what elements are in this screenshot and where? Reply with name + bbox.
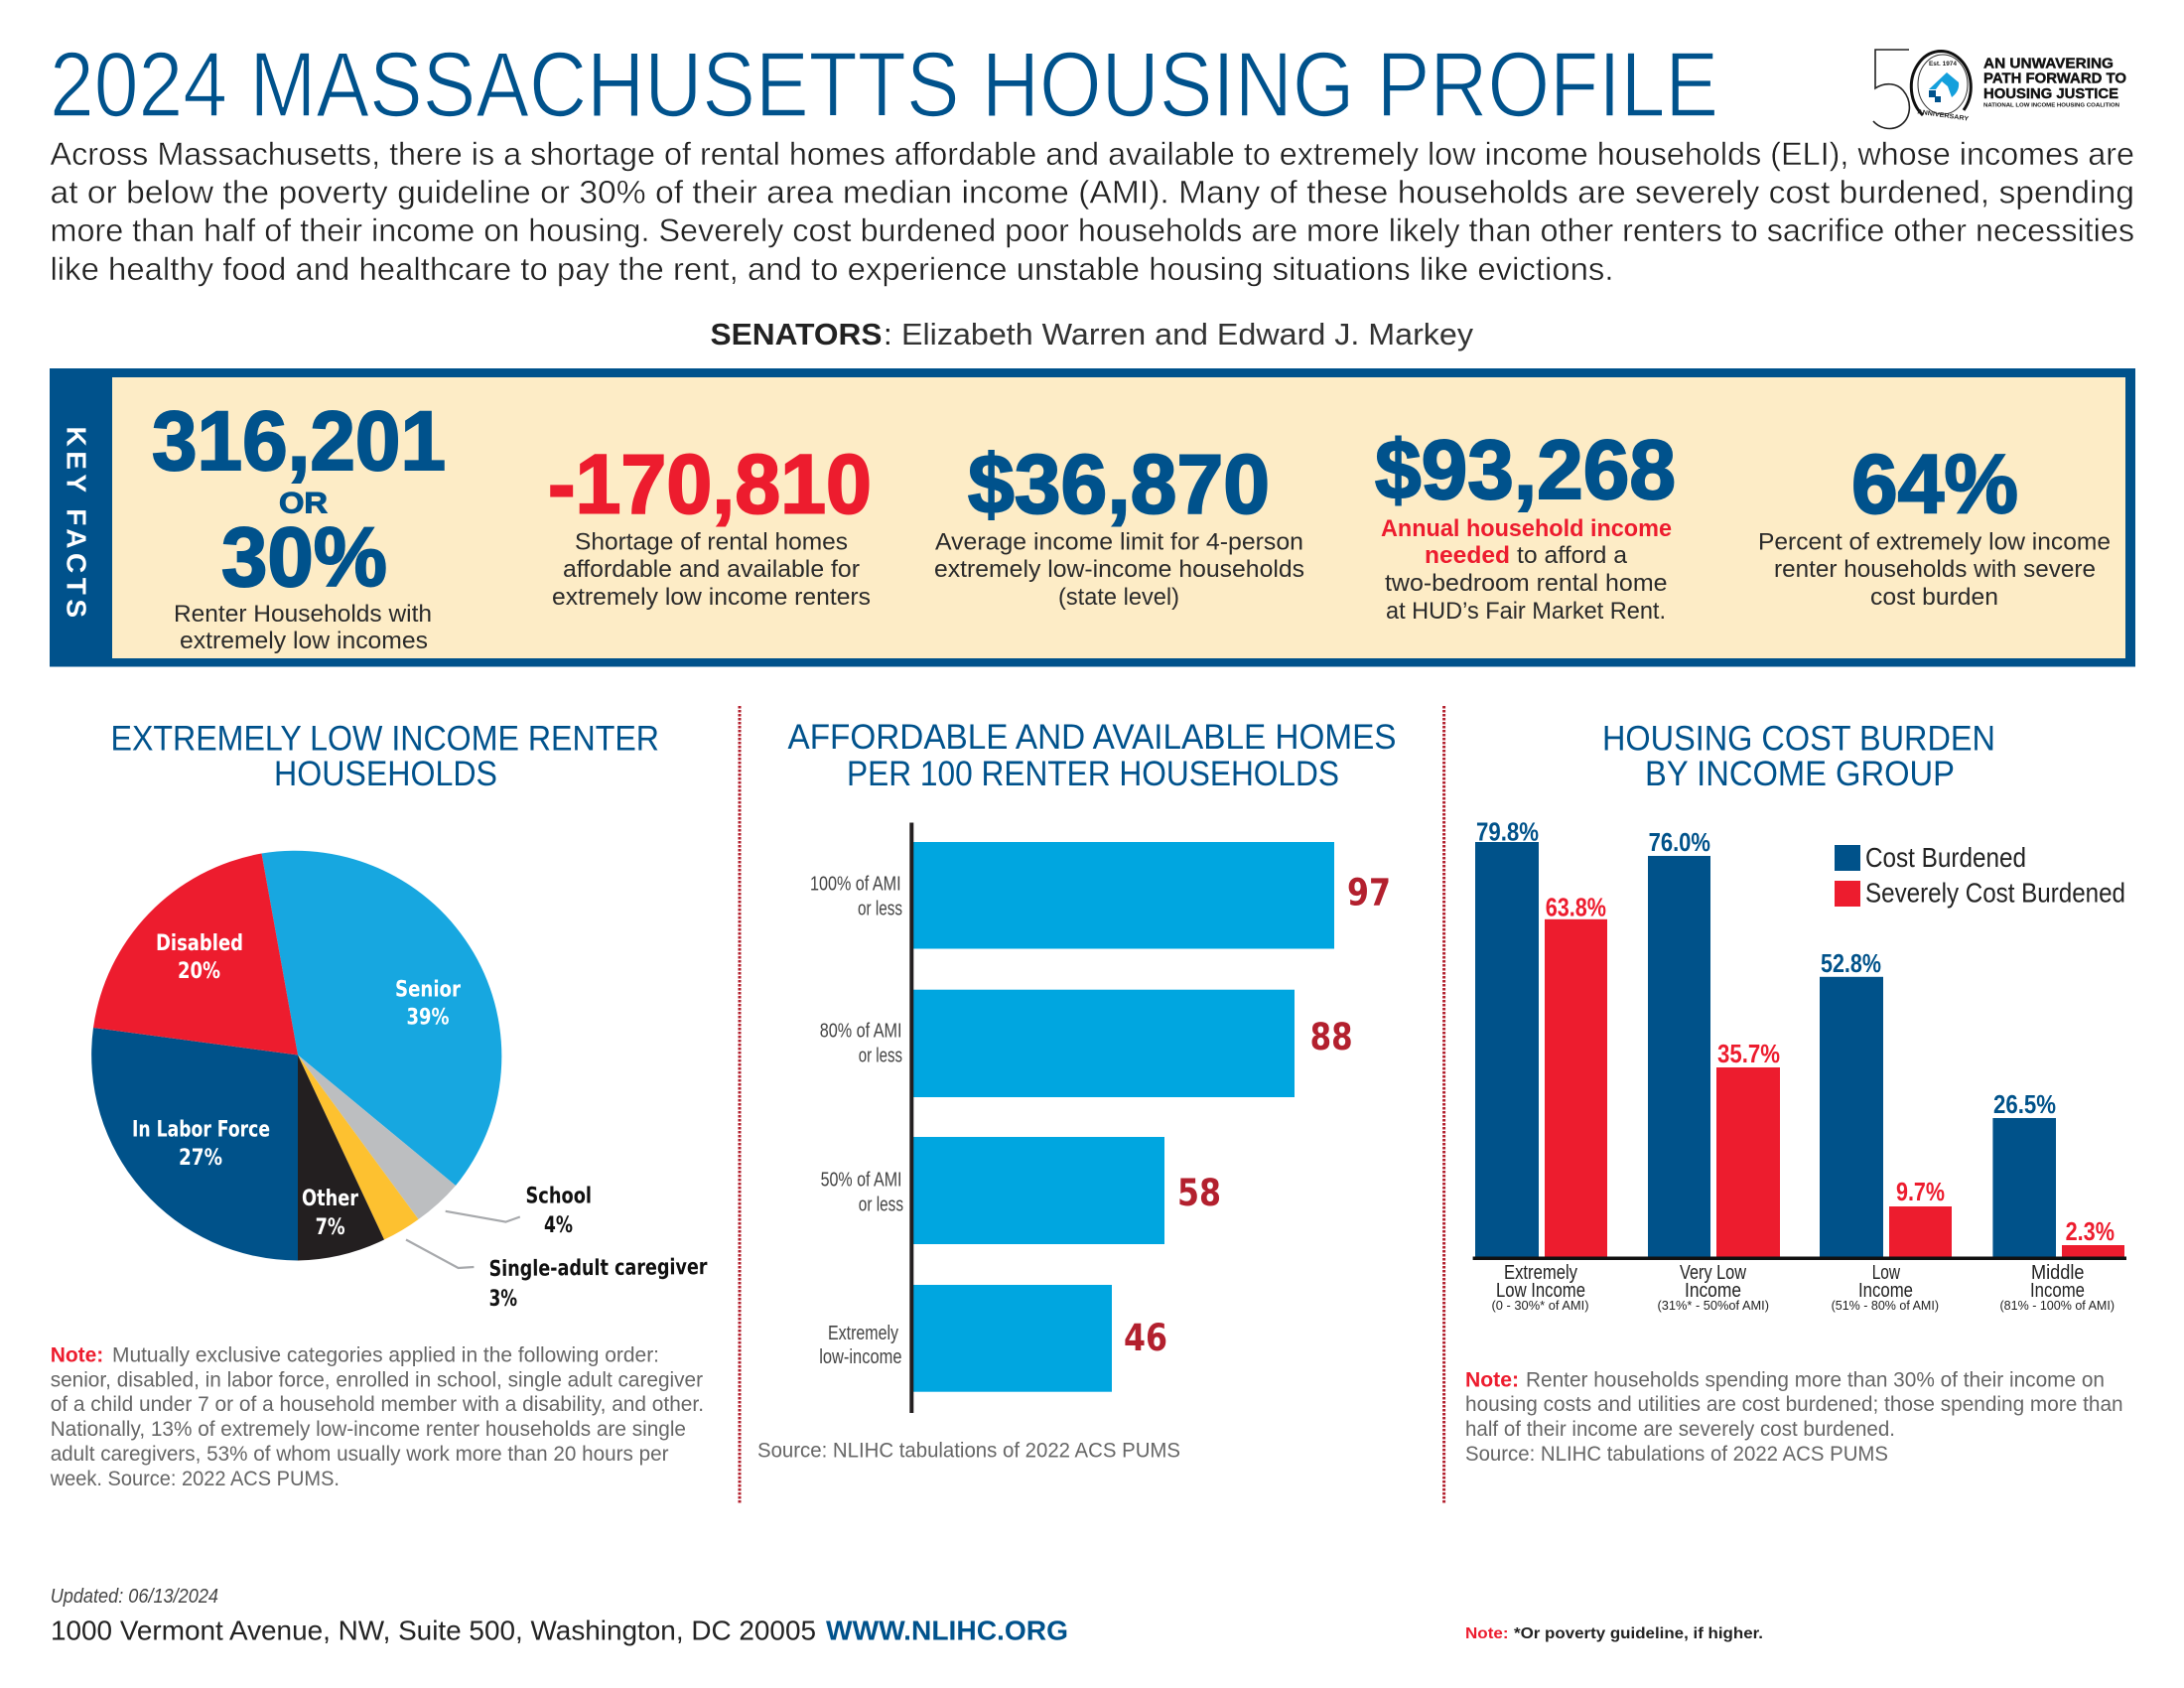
heading: HOUSING COST BURDEN: [1602, 719, 1995, 759]
logo: NLIHC 50th anniversary: AN UNWAVERING: [1983, 57, 2114, 72]
pie chart: 27%: [179, 1146, 222, 1171]
pie chart: 20%: [178, 959, 220, 984]
panel: housing cost burden by income group: [1465, 719, 2126, 1466]
footer: updated date: Updated: 06/13/2024: [51, 1586, 218, 1608]
note text: half of their income are severely cost burdened.: [1465, 1418, 1895, 1441]
stat: rental home shortage: extremely low income renters: [552, 584, 871, 611]
footnote: *Or poverty guideline, if higher.: [1514, 1625, 1763, 1642]
senators line: SENATORS: [711, 317, 882, 352]
logo: NLIHC 50th anniversary: Est. 1974: [1929, 62, 1958, 68]
stat: annual household income needed: two-bedroom rental home: [1385, 570, 1668, 597]
grouped bar chart: Income: [1858, 1280, 1913, 1302]
stat: rental home shortage: -170,810: [548, 437, 872, 530]
grouped bar chart: (81% - 100% of AMI): [1999, 1298, 2115, 1313]
stat: income limit: [934, 437, 1304, 611]
callout: school: School: [526, 1184, 592, 1209]
key facts vertical label: KEY FACTS: [62, 427, 91, 618]
stat: income limit: $36,870: [968, 437, 1270, 530]
logo: NLIHC 50th anniversary: HOUSING JUSTICE: [1983, 86, 2118, 102]
legend: Severely Cost Burdened: [1865, 878, 2125, 908]
bar chart: or less: [859, 1046, 902, 1067]
stat: renter households with extremely low incomes: Renter Households with: [174, 601, 432, 628]
stat: annual household income needed: Annual household income: [1381, 515, 1672, 542]
stat: severe cost burden: Percent of extremely low income: [1758, 528, 2111, 556]
legend: Cost Burdened: [1865, 842, 2026, 873]
callout: single-adult caregiver: [406, 1239, 708, 1312]
grouped bar chart: 63.8%: [1546, 893, 1606, 922]
logo: NLIHC 50th anniversary: [1873, 50, 2126, 128]
note text: Note:: [1465, 1368, 1519, 1391]
heading: EXTREMELY LOW INCOME RENTER: [111, 719, 659, 759]
pie chart: [91, 851, 501, 1261]
stat: annual household income needed: $93,268: [1375, 423, 1676, 516]
grouped bar chart: (31%* - 50%of AMI): [1658, 1298, 1769, 1313]
panel: key facts: [50, 368, 2135, 667]
heading: AFFORDABLE AND AVAILABLE HOMES: [788, 718, 1396, 757]
note text: week. Source: 2022 ACS PUMS.: [50, 1468, 340, 1490]
grouped bar chart: (0 - 30%* of AMI): [1491, 1298, 1588, 1313]
grouped bar chart: 76.0%: [1649, 827, 1710, 857]
stat: annual household income needed: [1375, 423, 1676, 625]
stat: income limit: Average income limit for 4-person: [935, 528, 1303, 556]
grouped bar chart: 79.8%: [1476, 817, 1539, 847]
grouped bar chart: (51% - 80% of AMI): [1832, 1298, 1939, 1313]
stat: income limit: (state level): [1058, 584, 1179, 611]
grouped bar chart: Income: [1685, 1280, 1741, 1302]
grouped bar chart: Income: [2030, 1280, 2085, 1302]
heading: [788, 718, 1396, 793]
note text: Renter households spending more than 30% of their income on: [1526, 1368, 2105, 1391]
stat: rental home shortage: Shortage of rental homes: [575, 528, 848, 556]
stat: income limit: extremely low-income households: [934, 556, 1304, 583]
logo: NLIHC 50th anniversary: PATH FORWARD TO: [1983, 71, 2126, 87]
intro text block: Across Massachusetts, there is a shortage of rental homes affordable and available to extremely low income households (ELI), whose incomes are: [50, 136, 2134, 172]
note text: Nationally, 13% of extremely low-income renter households are single: [51, 1418, 686, 1441]
stat: renter households with extremely low incomes: [152, 394, 446, 654]
pie chart: 7%: [316, 1215, 345, 1240]
grouped bar chart: 35.7%: [1717, 1039, 1780, 1068]
grouped bar chart: 2.3%: [2066, 1216, 2115, 1246]
stat: annual household income needed: needed: [1425, 542, 1510, 569]
note text: [1465, 1368, 2123, 1466]
stat: renter households with extremely low incomes: 30%: [221, 510, 387, 604]
pie chart: Senior: [395, 977, 461, 1003]
bar chart: [810, 822, 1391, 1413]
bar chart: Extremely: [828, 1323, 898, 1344]
stat: severe cost burden: 64%: [1851, 437, 2018, 530]
callout: school: [446, 1184, 592, 1238]
pie chart: In Labor Force: [132, 1118, 270, 1142]
grouped bar chart: 9.7%: [1896, 1177, 1945, 1206]
legend: [1835, 842, 2125, 908]
bar chart: 100% of AMI: [810, 874, 901, 896]
grouped bar chart: 52.8%: [1821, 948, 1881, 978]
stat: renter households with extremely low incomes: extremely low incomes: [180, 628, 428, 654]
heading: [1602, 719, 1995, 793]
grouped bar chart: 26.5%: [1993, 1089, 2056, 1119]
note text: adult caregivers, 53% of whom usually work more than 20 hours per: [51, 1443, 668, 1466]
intro text block: at or below the poverty guideline or 30% of their area median income (AMI). Many of these households are severely cost burdened, spending: [50, 175, 2134, 211]
intro text block: like healthy food and healthcare to pay the rent, and to experience unstable housing situations like evictions.: [50, 251, 1614, 287]
logo: NLIHC 50th anniversary: NATIONAL LOW INCOME HOUSING COALITION: [1983, 102, 2119, 108]
title: 2024 MASSACHUSETTS HOUSING PROFILE: [50, 33, 1718, 136]
grouped bar chart: Very Low: [1680, 1262, 1746, 1284]
grouped bar chart: Low Income: [1496, 1280, 1585, 1302]
note text: [50, 1344, 704, 1490]
senators line: Elizabeth Warren and Edward J. Markey: [901, 317, 1474, 352]
grouped bar chart: Middle: [2031, 1262, 2085, 1284]
callout: single-adult caregiver: Single-adult caregiver: [488, 1255, 708, 1282]
bar chart: 46: [1124, 1317, 1167, 1359]
note text: Source: NLIHC tabulations of 2022 ACS PUMS: [1465, 1443, 1888, 1466]
intro text block: [50, 136, 2134, 287]
intro text block: more than half of their income on housing. Severely cost burdened poor households are more likely than other renters to sacrifice other necessities: [50, 212, 2134, 248]
pie chart: 39%: [407, 1006, 449, 1031]
pie chart: Disabled: [156, 931, 243, 956]
stat: severe cost burden: cost burden: [1870, 584, 1998, 611]
bar chart: 58: [1177, 1172, 1221, 1214]
panel: extremely low income renter households: [50, 719, 708, 1490]
panel: affordable and available homes: [757, 718, 1396, 1462]
stat: renter households with extremely low incomes: 316,201: [152, 394, 446, 488]
stat: rental home shortage: [548, 437, 872, 611]
heading: [111, 719, 659, 793]
heading: PER 100 RENTER HOUSEHOLDS: [847, 755, 1339, 793]
note text: of a child under 7 or of a household member with a disability, and other.: [51, 1393, 704, 1416]
footer: address and website: WWW.NLIHC.ORG: [826, 1615, 1068, 1646]
stat: renter households with extremely low incomes: OR: [279, 487, 328, 520]
heading: HOUSEHOLDS: [274, 755, 497, 793]
bar chart: 97: [1347, 872, 1391, 914]
note text: Note:: [51, 1344, 103, 1367]
note text: Mutually exclusive categories applied in the following order:: [112, 1344, 659, 1367]
callout: single-adult caregiver: 3%: [489, 1287, 517, 1312]
heading: BY INCOME GROUP: [1645, 755, 1955, 793]
bar chart: 80% of AMI: [820, 1020, 901, 1042]
stat: rental home shortage: affordable and available for: [563, 556, 860, 583]
stat: annual household income needed: at HUD’s Fair Market Rent.: [1386, 598, 1666, 625]
callout: school: 4%: [544, 1213, 573, 1238]
grouped bar chart: Extremely: [1504, 1262, 1577, 1284]
grouped bar chart: [1473, 817, 2126, 1313]
grouped bar chart: Low: [1872, 1262, 1900, 1284]
pie chart: Other: [302, 1187, 358, 1211]
note text: senior, disabled, in labor force, enrolled in school, single adult caregiver: [51, 1368, 703, 1391]
note text: housing costs and utilities are cost burdened; those spending more than: [1465, 1393, 2123, 1416]
stat: annual household income needed: to afford a: [1517, 542, 1628, 569]
logo: NLIHC 50th anniversary: ANNIVERSARY: [1917, 108, 1970, 123]
bar chart: 50% of AMI: [821, 1169, 901, 1191]
senators line: :: [884, 317, 892, 352]
source text: Source: NLIHC tabulations of 2022 ACS PUMS: [757, 1440, 1180, 1462]
stat: severe cost burden: renter households with severe: [1774, 556, 2096, 583]
stat: severe cost burden: [1758, 437, 2111, 611]
bar chart: low-income: [819, 1346, 901, 1368]
bar chart: or less: [859, 1195, 903, 1216]
footer: address and website: 1000 Vermont Avenue, NW, Suite 500, Washington, DC 20005: [51, 1615, 816, 1646]
bar chart: 88: [1310, 1016, 1353, 1058]
footnote: Note:: [1465, 1625, 1509, 1642]
bar chart: or less: [858, 899, 902, 920]
